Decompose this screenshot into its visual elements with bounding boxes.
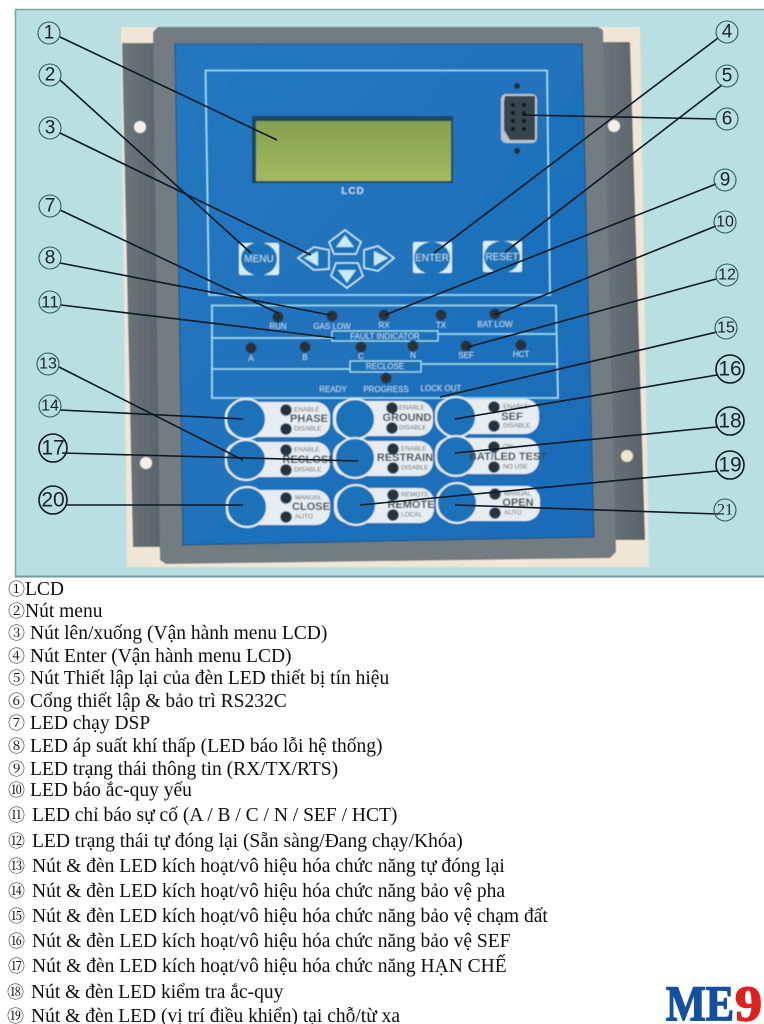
button card: bat led test: BAT/LED TEST: [469, 451, 547, 463]
legend list: LED báo ắc-quy yếu: [30, 780, 192, 801]
button card: restrain: [333, 438, 433, 478]
callout numbers: 15: [717, 320, 735, 336]
legend list: ③: [8, 619, 25, 644]
callout numbers: 1: [44, 22, 54, 44]
button card: reclose: RECLOSE: [282, 454, 336, 466]
legend list: [7, 575, 548, 1024]
menu button: MENU: [244, 254, 274, 265]
fault LEDs: [246, 340, 529, 363]
arrow keys: [298, 230, 394, 288]
button card: remote: REMOTE: [401, 492, 429, 498]
reset button: [483, 241, 522, 273]
legend list: ⑬: [8, 852, 25, 877]
callout numbers: 18: [718, 410, 742, 432]
reset button: RESET: [485, 252, 519, 263]
legend list: ⑯: [8, 927, 25, 952]
status LEDs: [269, 308, 513, 331]
button card: restrain: RESTRAIN: [377, 452, 433, 464]
button card: bat led test: ON: [503, 444, 513, 450]
button card: phase: [225, 399, 330, 439]
callout lines: [59, 37, 722, 514]
button card: reclose: DISABLE: [294, 466, 322, 474]
RS232 port: [501, 83, 537, 154]
button card: sef: DISABLE: [503, 422, 531, 430]
callout numbers: 5: [722, 66, 732, 86]
bezel: [153, 27, 616, 564]
button card: open: MANUAL: [504, 490, 531, 498]
fault LEDs: SEF: [458, 351, 474, 360]
photo backdrop: [121, 27, 649, 567]
legend list: ⑱: [7, 978, 24, 1003]
top frame: [206, 70, 550, 295]
button card: open: AUTO: [504, 510, 522, 516]
LCD screen: [252, 116, 453, 183]
button card: phase: ENABLE: [294, 406, 320, 414]
legend list: Nút & đèn LED kích hoạt/vô hiệu hóa chức năng bảo vệ SEF: [32, 931, 511, 952]
callout numbers: 16: [718, 358, 742, 380]
button card: restrain: ENABLE: [401, 446, 427, 452]
legend list: LED chỉ báo sự cố (A / B / C / N / SEF / HCT): [32, 805, 397, 826]
callout numbers: 10: [716, 214, 734, 230]
fault LEDs: A: [248, 354, 254, 363]
callout numbers: 6: [722, 108, 732, 130]
callout numbers: 14: [41, 398, 59, 414]
fault LEDs: C: [358, 352, 364, 361]
button card: sef: ENABLE: [503, 404, 529, 410]
reclose LED and labels: LOCK OUT: [421, 384, 462, 393]
status LEDs: GAS LOW: [313, 322, 351, 331]
legend list: Nút & đèn LED kích hoạt/vô hiệu hóa chức năng tự đóng lại: [32, 856, 505, 877]
callout numbers: [37, 21, 744, 521]
reclose LED and labels: [319, 372, 462, 394]
legend list: ④: [8, 642, 25, 667]
legend list: ⑫: [8, 827, 25, 852]
button card: phase: DISABLE: [294, 426, 322, 432]
status LEDs: RX: [378, 321, 390, 330]
button card: reclose: ENABLE: [294, 446, 320, 454]
menu button: [239, 242, 279, 276]
legend list: ⑤: [8, 664, 25, 689]
callout numbers: 13: [39, 356, 57, 372]
callout numbers: 20: [41, 488, 65, 512]
reclose LED and labels: PROGRESS: [363, 385, 409, 394]
legend list: ⑨: [8, 755, 25, 780]
legend list: ⑩: [8, 776, 25, 801]
button card: close: CLOSE: [292, 501, 330, 513]
background panel: [15, 9, 764, 577]
legend list: ⑰: [8, 952, 25, 977]
legend list: Nút Enter (Vận hành menu LCD): [30, 646, 292, 667]
legend list: Nút & đèn LED kích hoạt/vô hiệu hóa chức năng bảo vệ pha: [32, 881, 505, 902]
legend list: Nút menu: [25, 601, 103, 622]
legend list: ⑮: [8, 902, 25, 927]
button card: remote: REMOTE: [387, 499, 435, 511]
button card: open: [436, 483, 540, 523]
button card: open: OPEN: [502, 497, 534, 509]
status LEDs: BAT LOW: [477, 320, 513, 329]
status LEDs: RUN: [269, 322, 287, 331]
legend list: Nút & đèn LED kích hoạt/vô hiệu hóa chức năng bảo vệ chạm đất: [32, 906, 548, 927]
callout numbers: 7: [45, 196, 55, 216]
legend list: ⑪: [8, 801, 25, 826]
right mounting plate: [601, 42, 645, 540]
device photo: [121, 27, 649, 567]
reclose label: [350, 361, 421, 372]
callout numbers: 9: [720, 170, 730, 190]
left mounting plate: [122, 43, 162, 547]
reclose LED and labels: READY: [319, 385, 347, 394]
callout numbers: 3: [45, 118, 55, 138]
button card: bat led test: [435, 436, 547, 476]
legend list: LCD: [25, 579, 64, 600]
blue front panel: [175, 44, 594, 545]
button card: ground: DISABLE: [399, 424, 427, 432]
legend list: ⑦: [8, 709, 25, 734]
button card: remote: [334, 485, 435, 525]
button card: ground: [333, 399, 433, 439]
fault indicator label: FAULT INDICATOR: [350, 332, 420, 341]
reclose label: RECLOSE: [366, 362, 404, 371]
legend list: Nút lên/xuống (Vận hành menu LCD): [30, 623, 327, 644]
callout numbers: 17: [41, 436, 65, 460]
legend list: Nút & đèn LED kiểm tra ắc-quy: [31, 982, 284, 1003]
button card: close: [226, 487, 330, 527]
fault LEDs: HCT: [513, 350, 529, 359]
legend list: ⑭: [8, 877, 25, 902]
enter button: [413, 242, 452, 274]
legend list: LED áp suất khí thấp (LED báo lỗi hệ thống): [30, 736, 383, 757]
button card: reclose: [225, 440, 336, 480]
callout numbers: 2: [45, 64, 55, 86]
button card: close: AUTO: [295, 514, 313, 520]
enter button: ENTER: [415, 253, 449, 264]
legend list: LED chạy DSP: [30, 713, 150, 734]
callout numbers: 19: [718, 454, 742, 476]
legend list: Nút & đèn LED kích hoạt/vô hiệu hóa chức năng HẠN CHẾ: [32, 955, 507, 977]
button card: remote: LOCAL: [401, 512, 423, 518]
callout numbers: 8: [45, 248, 55, 268]
callout numbers: 12: [718, 266, 736, 284]
button card: restrain: DISABLE: [401, 464, 429, 472]
status LEDs: TX: [436, 321, 447, 330]
legend list: ①: [8, 575, 25, 600]
fault LEDs: B: [302, 353, 308, 362]
legend list: LED trạng thái tự đóng lại (Sẵn sàng/Đang chạy/Khóa): [32, 831, 463, 852]
button card: ground: ENABLE: [399, 404, 425, 412]
legend list: ⑥: [8, 687, 25, 712]
callout numbers: 4: [722, 22, 733, 42]
callout numbers: 21: [717, 502, 733, 518]
button card: phase: PHASE: [290, 413, 328, 425]
indicator panel: [211, 306, 558, 398]
callout numbers: 11: [41, 292, 59, 312]
legend list: LED trạng thái thông tin (RX/TX/RTS): [30, 759, 338, 780]
button card: bat led test: NO USE: [503, 464, 529, 470]
button card: sef: [435, 397, 539, 437]
legend list: Cổng thiết lập & bảo trì RS232C: [30, 691, 287, 712]
fault LEDs: N: [410, 351, 416, 360]
LCD label: LCD: [341, 186, 365, 197]
button card: ground: GROUND: [383, 412, 431, 424]
fault indicator label: [332, 331, 438, 341]
legend list: ②: [8, 597, 25, 622]
button card: close: MANUAL: [295, 494, 322, 502]
legend list: Nút Thiết lập lại của đèn LED thiết bị tín hiệu: [30, 668, 389, 689]
legend list: ⑧: [8, 732, 25, 757]
button card: sef: SEF: [501, 411, 523, 423]
